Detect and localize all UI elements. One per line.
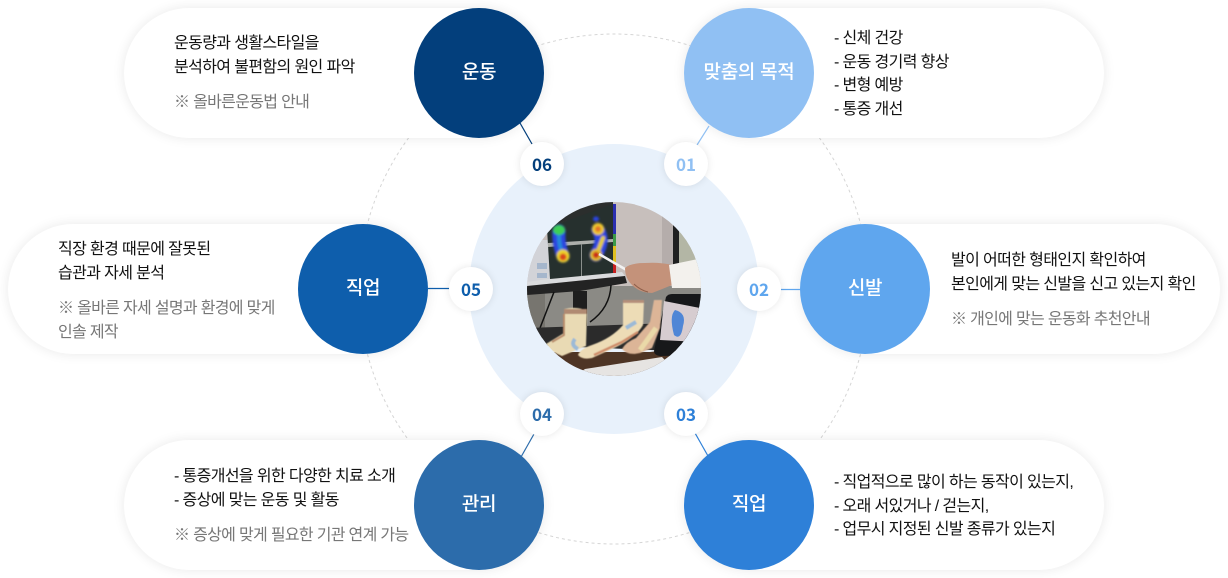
number 02: 02	[749, 276, 769, 301]
text: management	[174, 468, 408, 544]
circle: 맞춤의 목적: 맞춤의 목적	[704, 62, 794, 83]
panel: management pill	[124, 440, 544, 570]
text: shoes	[951, 252, 1196, 328]
text: management: ※ 증상에 맞게 필요한 기관 연계 가능	[174, 527, 408, 544]
text: management: - 증상에 맞는 운동 및 활동	[174, 492, 339, 509]
foot models	[546, 300, 662, 359]
text: shoes: ※ 개인에 맞는 운동화 추천안내	[951, 311, 1150, 328]
number 01	[664, 142, 708, 186]
shirt	[669, 259, 703, 288]
stand and cables	[573, 291, 587, 326]
text: purpose	[834, 30, 949, 118]
circle: 맞춤의 목적	[684, 8, 814, 138]
circle: 직업 left	[298, 224, 428, 354]
number 04	[520, 392, 564, 436]
text: occupation left: ※ 올바른 자세 설명과 환경에 맞게	[58, 300, 275, 317]
photo: foot scan and models	[527, 202, 701, 376]
text: shoes: 본인에게 맞는 신발을 신고 있는지 확인	[951, 276, 1196, 293]
text: exercise: 운동량과 생활스타일을	[174, 35, 319, 52]
text: occupation right: - 오래 서있거나 / 걷는지,	[834, 498, 989, 515]
text: purpose: - 신체 건강	[834, 30, 903, 47]
panel: occupation pill right	[684, 440, 1104, 570]
number 02	[737, 267, 781, 311]
circle: 운동	[414, 8, 544, 138]
monitor bottom white and bezel	[552, 272, 625, 284]
panel: occupation pill left	[8, 224, 428, 354]
panel: purpose pill	[684, 8, 1104, 138]
central light circle	[469, 144, 759, 434]
text: occupation right: - 업무시 지정된 신발 종류가 있는지	[834, 521, 1055, 538]
circle: 관리	[414, 440, 544, 570]
panel: shoes pill	[800, 224, 1220, 354]
text: occupation right	[834, 474, 1073, 538]
number 05: 05	[461, 276, 481, 301]
circle: 직업 right: 직업	[732, 494, 766, 515]
text: exercise	[174, 34, 355, 111]
tablet	[654, 294, 705, 356]
text: exercise: ※ 올바른운동법 안내	[174, 94, 309, 111]
monitor UI left	[528, 240, 550, 282]
text: occupation right: - 직업적으로 많이 하는 동작이 있는지,	[834, 474, 1073, 491]
text: exercise: 분석하여 불편함의 원인 파악	[174, 59, 355, 76]
colour scale	[613, 204, 616, 234]
text: occupation left: 직장 환경 때문에 잘못된	[58, 241, 210, 258]
number 01: 01	[676, 151, 696, 176]
circle: 직업 right	[684, 440, 814, 570]
circle: 운동: 운동	[462, 62, 496, 83]
pen	[598, 252, 626, 270]
lower wall	[527, 286, 701, 338]
table and paper	[554, 348, 678, 376]
hand	[625, 263, 672, 293]
text: purpose: - 운동 경기력 향상	[834, 54, 949, 71]
text: management: - 통증개선을 위한 다양한 치료 소개	[174, 468, 395, 485]
number 04: 04	[532, 401, 552, 426]
text: occupation left: 습관과 자세 분석	[58, 265, 164, 282]
circle: 관리: 관리	[462, 494, 496, 515]
dark heat-map screen	[547, 203, 613, 279]
circle: 신발	[800, 224, 930, 354]
text: purpose: - 변형 예방	[834, 77, 903, 94]
number 03	[664, 392, 708, 436]
text: shoes: 발이 어떠한 형태인지 확인하여	[951, 252, 1146, 269]
number 06	[520, 142, 564, 186]
text: occupation left	[58, 240, 275, 341]
number 05	[449, 267, 493, 311]
wall behind monitor	[527, 202, 701, 302]
text: occupation left: 인솔 제작	[58, 324, 118, 341]
circle: 직업 left: 직업	[346, 278, 380, 299]
text: purpose: - 통증 개선	[834, 101, 903, 118]
panel: exercise pill	[124, 8, 544, 138]
number 06: 06	[532, 151, 552, 176]
circle: 신발: 신발	[848, 278, 882, 299]
number 03: 03	[676, 401, 696, 426]
